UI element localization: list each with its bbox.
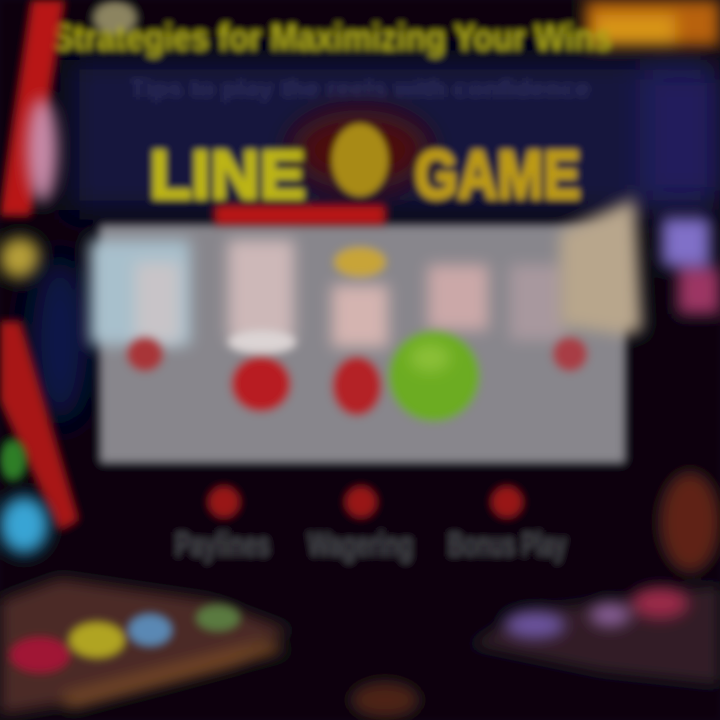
bullet 1 [175,486,270,564]
table left with chips [0,578,290,715]
icon: green ball [389,331,479,421]
bullet 3 [448,486,566,564]
icon: top lamp [93,1,137,35]
table right with chips [470,585,720,685]
reel 1 [90,240,190,371]
orange character right [660,472,720,572]
left neon column [0,0,88,553]
panel: slot machine reels [90,198,642,463]
bottom glow [351,682,419,718]
heading: game logo: LINE [150,137,305,213]
slot machine heading glow [290,110,430,190]
decoration: top right orange glow [585,0,720,46]
bullet 2: Wagering [308,526,413,564]
reel 2 [228,240,296,411]
title: Strategies for Maximizing Your Wins [52,17,612,58]
heading: game logo [150,124,580,213]
bullet 3: Bonus Play [448,526,566,564]
bullet 2 [308,486,413,564]
reel 4 [389,265,488,421]
icon: chips [10,605,240,673]
subtitle: Tips to play the reels with confidence [130,75,590,103]
right neon cluster [662,218,720,314]
reel 5 [510,265,587,371]
reel 3 [332,247,388,415]
bullet 1: Paylines [175,526,270,564]
heading: game logo: GAME [415,137,580,213]
right cream card [560,198,642,335]
